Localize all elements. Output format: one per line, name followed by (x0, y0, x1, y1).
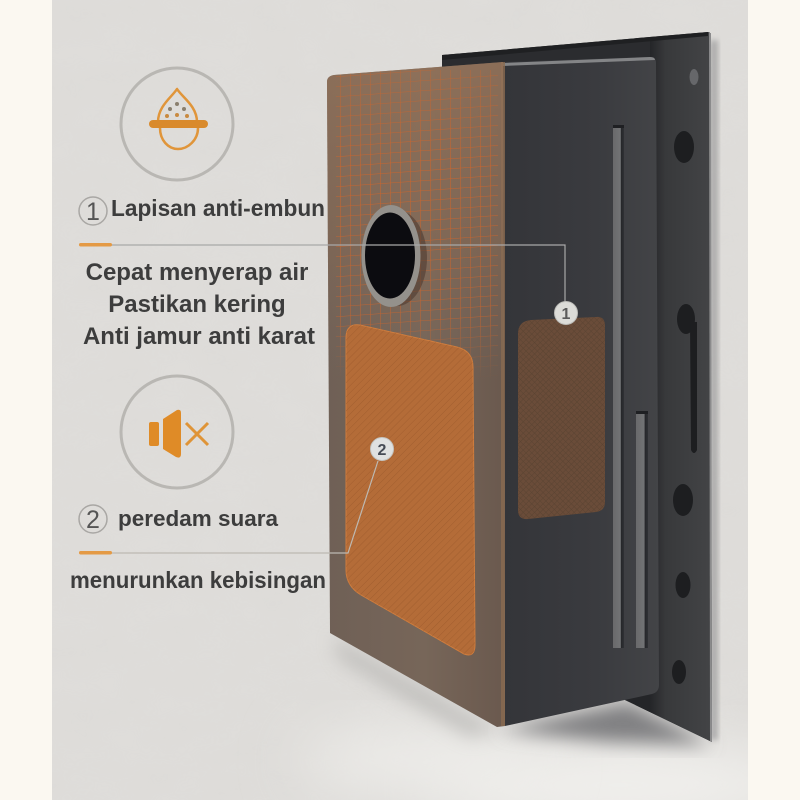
callout marker 1: 1 (562, 306, 571, 323)
callout marker 2: 2 (378, 442, 387, 459)
lens ring (362, 205, 427, 307)
icon: muted speaker in circle (121, 376, 233, 488)
plate holes (672, 69, 698, 684)
text block: benefit of layer 2: menurunkan kebisingan (70, 567, 326, 593)
text block: benefits of layer 1: Anti jamur anti karat (83, 323, 315, 350)
product: door lock box (327, 32, 712, 742)
callout line 2 (79, 461, 378, 554)
pad 1: anti-condensation layer (518, 317, 605, 519)
heading 1: Lapisan anti-embun (111, 195, 325, 221)
text block: benefits of layer 1: Pastikan kering (108, 291, 286, 318)
callout marker 2 (370, 438, 394, 460)
heading 1 number: 1 (86, 198, 100, 226)
vertical slot 1 (613, 125, 624, 648)
box left face (327, 60, 505, 727)
callout line 1 (79, 243, 565, 302)
heading 2: peredam suara (118, 506, 279, 531)
heading 2 number: 2 (86, 506, 100, 534)
heading 2 number (79, 505, 107, 534)
box right face (503, 57, 659, 726)
orange grid (336, 70, 498, 380)
callout marker 1 (554, 302, 578, 324)
text block: benefits of layer 1 (83, 259, 315, 350)
back mounting plate (442, 32, 712, 742)
text block: benefits of layer 1: Cepat menyerap air (86, 259, 308, 286)
icon: water drop in circle (121, 68, 233, 180)
pad 2: sound damping (346, 325, 475, 655)
heading 1 number (79, 197, 107, 226)
vertical slot 2 (636, 411, 648, 648)
